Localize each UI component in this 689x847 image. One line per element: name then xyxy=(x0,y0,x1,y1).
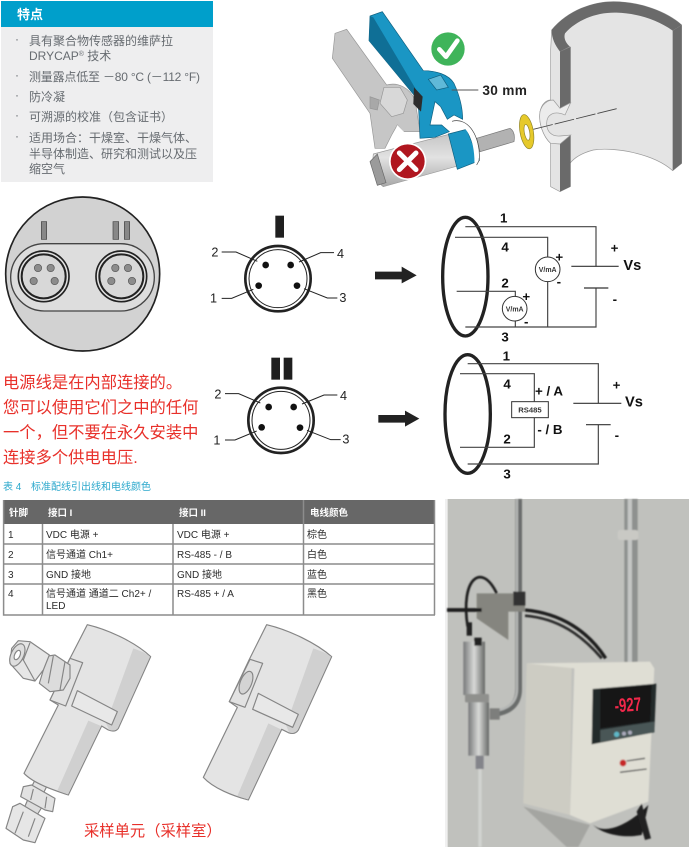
features list: 半导体制造、研究和测试以及压 xyxy=(29,146,197,161)
table rows xyxy=(8,528,327,612)
sampling cell caption: 采样单元（采样室） xyxy=(84,823,222,840)
table rows: 棕色 xyxy=(307,528,327,541)
table rows: 蓝色 xyxy=(307,568,327,581)
conduit pipes xyxy=(495,499,638,713)
wiring diagram II: 4 xyxy=(503,377,511,392)
features list: 测量露点低至 －80 °C (－112 °F) xyxy=(29,70,200,84)
socket II xyxy=(96,251,147,302)
panel: features xyxy=(1,1,213,182)
sensor probe xyxy=(463,622,500,847)
wiring diagram II: Vs xyxy=(625,395,643,411)
display unit xyxy=(592,684,656,744)
table header: 接口 II xyxy=(179,507,206,519)
table rows: 4 xyxy=(8,589,14,600)
blue wrench (correct) xyxy=(369,12,478,138)
features list: · xyxy=(15,129,19,143)
wiring diagram I: 3 xyxy=(501,330,509,345)
wiring diagram II: - / B xyxy=(537,422,563,437)
table rows: VDC 电源 + xyxy=(177,528,230,541)
table caption: 表 4 xyxy=(3,482,21,493)
table rows: 黑色 xyxy=(307,587,327,600)
wiring diagram I: - xyxy=(524,314,528,329)
wiring diagram I: + xyxy=(555,249,563,264)
pinout diagram II: 2 xyxy=(214,388,221,402)
features list: · xyxy=(15,108,19,122)
wiring diagram II: 1 xyxy=(503,349,511,364)
features list: 缩空气 xyxy=(29,161,65,176)
table header: 针脚 xyxy=(9,507,29,519)
features list: 具有聚合物传感器的维萨拉 xyxy=(29,33,173,48)
red note text: 电源线是在内部连接的。 xyxy=(3,374,182,392)
transmitter enclosure xyxy=(523,662,654,847)
bracket and cables xyxy=(447,577,606,658)
pinout diagram I: 3 xyxy=(339,291,346,305)
table header xyxy=(9,507,349,519)
wiring diagram I: 1 xyxy=(500,211,508,226)
wiring diagram I xyxy=(375,211,641,345)
table header: 接口 I xyxy=(48,507,72,519)
installation illustration: wrench and pipe xyxy=(332,2,682,192)
wiring diagram II: + / A xyxy=(535,384,563,399)
wiring diagram I: 4 xyxy=(501,240,509,255)
wiring diagram II: + xyxy=(613,377,621,392)
pinout diagram I: 2 xyxy=(211,246,218,260)
table rows: 1 xyxy=(8,530,14,541)
red note text xyxy=(3,374,198,467)
wiring table xyxy=(3,500,435,615)
table rows: RS-485 - / B xyxy=(177,550,232,561)
features list: 适用场合：干燥室、干燥气体、 xyxy=(29,130,197,145)
table rows: GND 接地 xyxy=(46,568,91,581)
green check mark xyxy=(431,32,465,66)
table rows: RS-485 + / A xyxy=(177,589,234,600)
features heading xyxy=(1,1,213,27)
features list: · xyxy=(15,32,19,46)
display reading: -927 xyxy=(614,695,642,717)
table rows: 3 xyxy=(8,570,14,581)
features list: · xyxy=(15,88,19,102)
features list: · xyxy=(15,68,19,82)
pinout diagram II: 1 xyxy=(213,433,220,447)
features list: ® xyxy=(79,50,85,58)
table rows: 信号通道 Ch1+ xyxy=(46,548,113,561)
table header: 电线颜色 xyxy=(310,507,349,519)
table rows: GND 接地 xyxy=(177,568,222,581)
pinout diagram I: 1 xyxy=(210,292,217,306)
wiring diagram I: 2 xyxy=(501,276,509,291)
wiring diagram II: - xyxy=(615,428,619,443)
red note text: 您可以使用它们之中的任何 xyxy=(3,399,198,417)
enclosure logo xyxy=(620,758,647,772)
arrow xyxy=(375,267,417,283)
wiring diagram II: 2 xyxy=(503,432,511,447)
probe body xyxy=(370,121,514,187)
wiring diagram I: V/mA xyxy=(539,267,557,274)
photo: installed transmitter xyxy=(445,499,689,847)
wiring diagram II: 3 xyxy=(503,467,511,482)
wiring diagram I: V/mA xyxy=(506,306,524,313)
connector end view xyxy=(6,197,160,351)
pinout diagram II xyxy=(213,358,349,453)
grey wrench (incorrect) xyxy=(332,29,420,148)
features list: 技术 xyxy=(84,49,111,63)
table caption: 标准配线引出线和电线颜色 xyxy=(31,480,151,493)
red note text: 一个，但不要在永久安装中 xyxy=(3,424,198,442)
pinout diagram II: 3 xyxy=(342,433,349,447)
pinout diagram I xyxy=(210,216,346,311)
table rows: VDC 电源 + xyxy=(46,528,99,541)
pinout diagram II: 4 xyxy=(340,389,347,403)
wiring diagram I: Vs xyxy=(623,258,641,274)
red cross mark xyxy=(389,143,426,180)
wiring diagram I: - xyxy=(557,274,561,289)
table rows: LED xyxy=(46,601,65,612)
gold washer xyxy=(517,113,536,150)
features list: 防冷凝 xyxy=(29,89,65,104)
red note text: 连接多个供电电压. xyxy=(3,449,138,467)
wiring diagram I: + xyxy=(522,289,530,304)
arrow xyxy=(378,411,419,427)
features list xyxy=(15,32,200,176)
wiring diagram II xyxy=(378,349,643,482)
wiring diagram II: RS485 xyxy=(518,406,542,415)
dimension label: 30 mm xyxy=(482,83,527,98)
wiring diagram I: - xyxy=(613,291,617,306)
table rows: 白色 xyxy=(307,548,327,561)
features list: 可溯源的校准（包含证书） xyxy=(29,109,173,124)
pinout diagram I: 4 xyxy=(337,247,344,261)
features heading: 特点 xyxy=(17,7,43,22)
features list: DRYCAP xyxy=(29,49,79,63)
table rows: 2 xyxy=(8,550,14,561)
table rows: 信号通道 通道二 Ch2+ / xyxy=(46,587,152,600)
sampling cell plain xyxy=(203,625,332,800)
socket I xyxy=(18,251,69,302)
wiring diagram I: + xyxy=(611,241,619,256)
pipe xyxy=(533,2,682,192)
sampling cell with fittings xyxy=(6,625,151,843)
